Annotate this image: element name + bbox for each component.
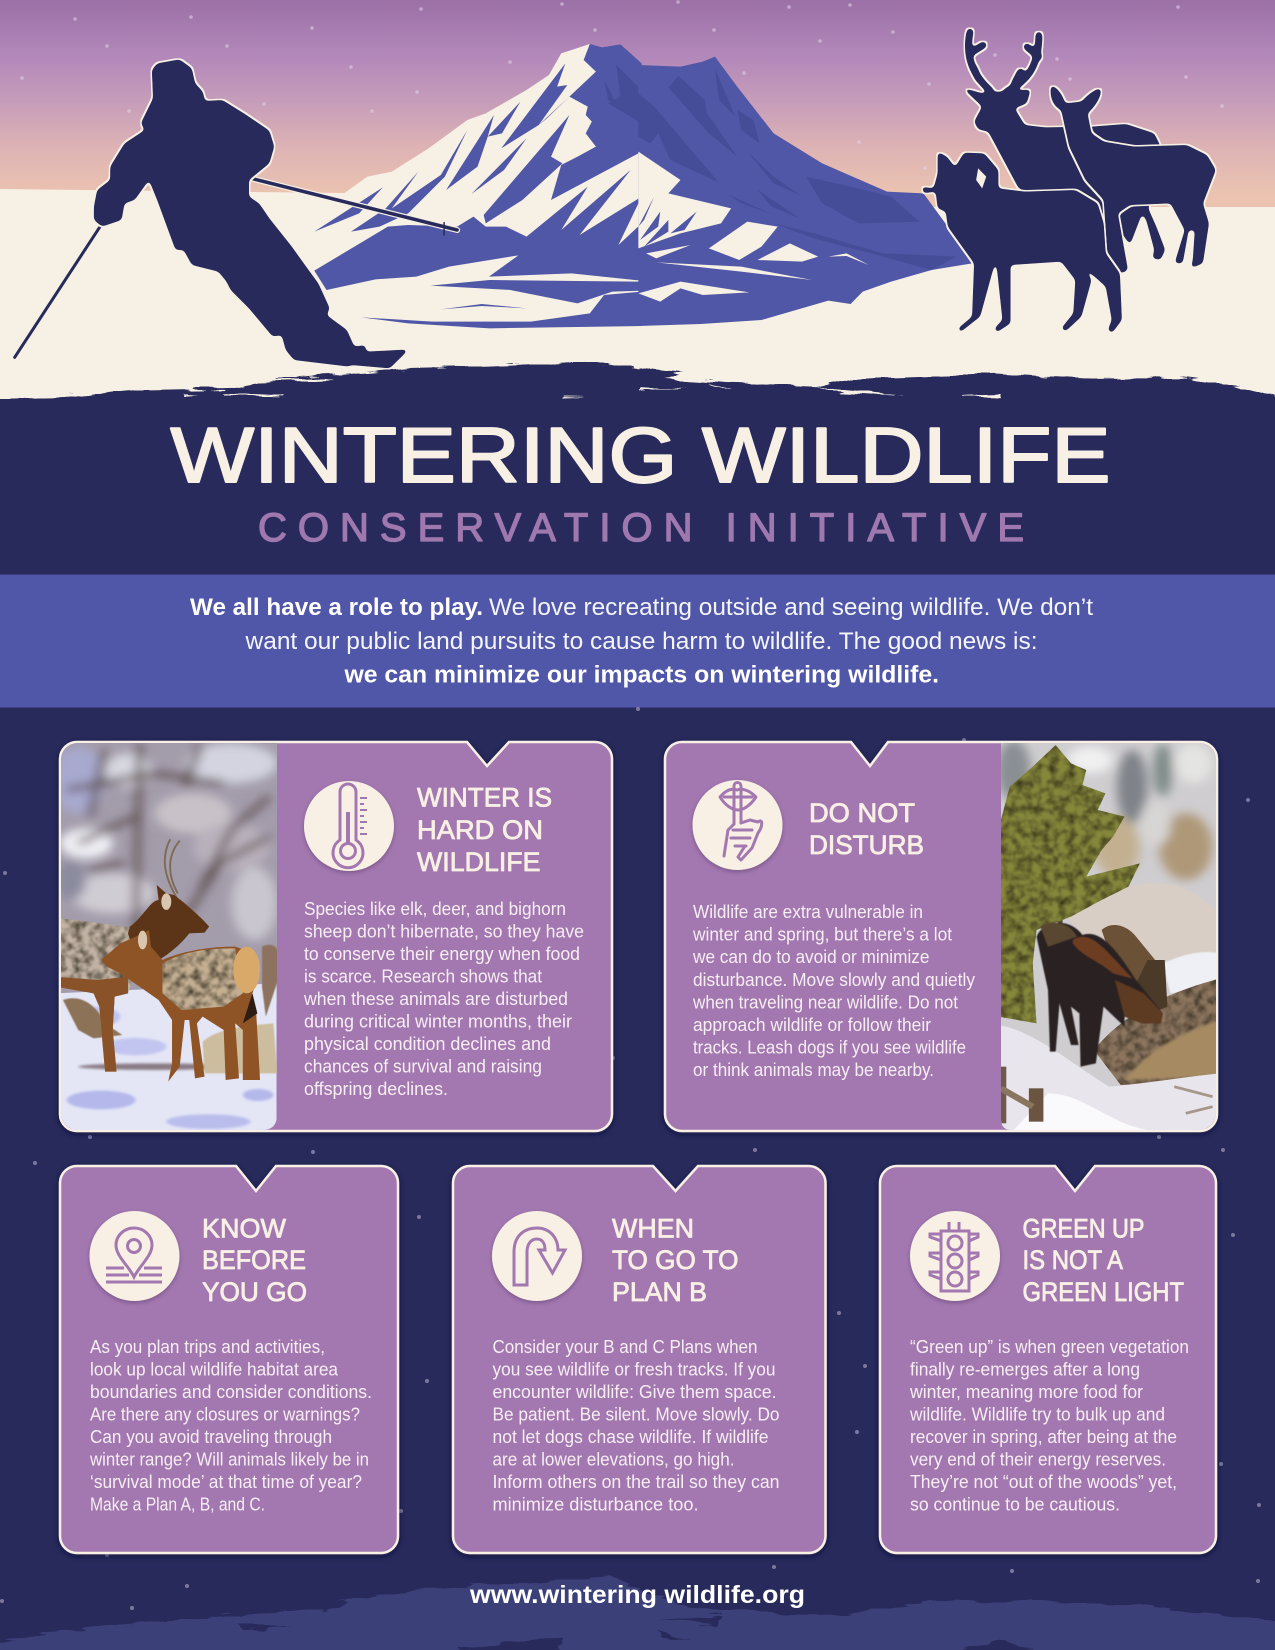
heading bbox=[202, 1214, 307, 1307]
wildlife silhouettes: stag, doe, bighorn ram bbox=[921, 32, 1216, 333]
body text: wildlife. Wildlife try to bulk up and bbox=[909, 1404, 1165, 1424]
panel: green up is not a green light bbox=[880, 1166, 1216, 1553]
doe bbox=[1051, 85, 1216, 273]
body text: physical condition declines and bbox=[304, 1034, 551, 1054]
body text: boundaries and consider conditions. bbox=[90, 1382, 372, 1402]
body text bbox=[909, 1337, 1189, 1514]
footer brush band bbox=[0, 1577, 1275, 1650]
body text: offspring declines. bbox=[304, 1079, 448, 1099]
body text: during critical winter months, their bbox=[304, 1012, 572, 1032]
body text: to conserve their energy when food bbox=[304, 944, 580, 964]
card shape bbox=[665, 742, 1217, 1131]
card shape bbox=[453, 1166, 826, 1553]
body text: finally re-emerges after a long bbox=[910, 1360, 1140, 1380]
body text: approach wildlife or follow their bbox=[693, 1015, 931, 1035]
body text: winter range? Will animals likely be in bbox=[89, 1450, 369, 1470]
right ski pole bbox=[251, 178, 457, 235]
body text: disturbance. Move slowly and quietly bbox=[693, 970, 975, 990]
body text bbox=[692, 902, 975, 1080]
sky stars bbox=[20, 0, 1224, 170]
skier silhouette bbox=[15, 59, 457, 368]
ram horn detail bbox=[976, 168, 986, 188]
panel: know before you go bbox=[60, 1166, 398, 1553]
body text: Inform others on the trail so they can bbox=[492, 1472, 780, 1492]
mountain right half bbox=[638, 57, 972, 326]
stag bbox=[962, 32, 1165, 260]
body text: so continue to be cautious. bbox=[910, 1494, 1120, 1514]
body text: They’re not “out of the woods” yet, bbox=[910, 1472, 1177, 1492]
heading: PLAN B bbox=[612, 1277, 707, 1307]
snow ground bbox=[0, 189, 1275, 420]
body text bbox=[303, 899, 584, 1099]
body text: or think animals may be nearby. bbox=[693, 1060, 934, 1080]
heading: WHEN bbox=[612, 1214, 694, 1244]
body text: you see wildlife or fresh tracks. If you bbox=[492, 1360, 776, 1380]
body text: when traveling near wildlife. Do not bbox=[692, 992, 958, 1012]
heading bbox=[809, 798, 924, 860]
body text: ‘survival mode’ at that time of year? bbox=[90, 1472, 362, 1492]
body text: we can do to avoid or minimize bbox=[692, 947, 930, 967]
body text: Make a Plan A, B, and C. bbox=[90, 1494, 265, 1514]
body text: very end of their energy reserves. bbox=[910, 1450, 1166, 1470]
heading: TO GO TO bbox=[612, 1245, 738, 1275]
body text: when these animals are disturbed bbox=[303, 989, 568, 1009]
body text: Be patient. Be silent. Move slowly. Do bbox=[492, 1404, 780, 1424]
heading: YOU GO bbox=[202, 1277, 307, 1307]
card shape bbox=[60, 742, 612, 1131]
panel: when to go to plan b bbox=[453, 1166, 826, 1553]
heading: WINTER IS bbox=[417, 782, 552, 812]
icon: u-turn arrow bbox=[492, 1211, 582, 1301]
body text: encounter wildlife: Give them space. bbox=[492, 1382, 776, 1402]
intro band bbox=[0, 574, 1275, 708]
navy stars bbox=[0, 707, 1261, 1610]
card shape bbox=[880, 1166, 1216, 1553]
card shape bbox=[60, 1166, 398, 1553]
icon: thermometer bbox=[304, 781, 394, 871]
body text: winter and spring, but there’s a lot bbox=[692, 924, 952, 944]
body text bbox=[89, 1337, 372, 1514]
body text: Can you avoid traveling through bbox=[90, 1427, 332, 1447]
heading bbox=[417, 782, 552, 877]
intro text bbox=[190, 594, 1093, 688]
intro text: we can minimize our impacts on wintering wildlife. bbox=[343, 662, 939, 688]
heading: WILDLIFE bbox=[417, 847, 540, 877]
heading: BEFORE bbox=[202, 1245, 306, 1275]
body text: are at lower elevations, go high. bbox=[492, 1450, 734, 1470]
photo: moose in snow bbox=[996, 740, 1220, 1137]
body text: look up local wildlife habitat area bbox=[90, 1360, 339, 1380]
intro text: We love recreating outside and seeing wildlife. We don’t bbox=[489, 594, 1093, 621]
icon: finger over lips bbox=[692, 780, 782, 870]
brush edge of navy band bbox=[0, 362, 1275, 430]
heading: DO NOT bbox=[809, 798, 915, 828]
body text: Consider your B and C Plans when bbox=[492, 1337, 758, 1357]
title: WINTERING WILDLIFE bbox=[170, 411, 1110, 499]
body text: “Green up” is when green vegetation bbox=[910, 1337, 1189, 1357]
body text: is scarce. Research shows that bbox=[304, 966, 542, 986]
heading bbox=[612, 1214, 738, 1307]
sky bbox=[0, 0, 1275, 212]
photo: elk in snow bbox=[51, 740, 285, 1137]
body text: tracks. Leash dogs if you see wildlife bbox=[693, 1038, 966, 1058]
heading: GREEN LIGHT bbox=[1022, 1277, 1184, 1307]
mountain left half bbox=[310, 44, 642, 333]
icon: map pin bbox=[90, 1211, 180, 1301]
heading: HARD ON bbox=[417, 815, 543, 845]
body text: Are there any closures or warnings? bbox=[90, 1404, 360, 1424]
body text: winter, meaning more food for bbox=[909, 1382, 1143, 1402]
body text: recover in spring, after being at the bbox=[910, 1427, 1177, 1447]
heading bbox=[1022, 1214, 1184, 1307]
intro text: want our public land pursuits to cause harm to wildlife. The good news is: bbox=[244, 628, 1037, 655]
body text: chances of survival and raising bbox=[304, 1056, 542, 1076]
heading: KNOW bbox=[202, 1214, 287, 1244]
left ski pole bbox=[15, 227, 100, 357]
panel: do not disturb bbox=[665, 740, 1220, 1137]
body text: sheep don’t hibernate, so they have bbox=[304, 922, 584, 942]
body text: Wildlife are extra vulnerable in bbox=[693, 902, 923, 922]
ram bbox=[921, 152, 1122, 333]
subtitle: CONSERVATION INITIATIVE bbox=[258, 506, 1024, 550]
icon: traffic light bbox=[910, 1211, 1000, 1301]
skier body bbox=[94, 59, 409, 368]
heading: IS NOT A bbox=[1022, 1245, 1123, 1275]
heading: DISTURB bbox=[809, 830, 924, 860]
body text: Species like elk, deer, and bighorn bbox=[304, 899, 566, 919]
header illustration: winter scene bbox=[0, 0, 1275, 430]
heading: GREEN UP bbox=[1022, 1214, 1144, 1244]
intro text: We all have a role to play. bbox=[190, 594, 483, 621]
body text: As you plan trips and activities, bbox=[90, 1337, 325, 1357]
body text: minimize disturbance too. bbox=[492, 1494, 698, 1514]
footer url: www.wintering wildlife.org bbox=[469, 1581, 805, 1609]
panel: winter is hard on wildlife bbox=[51, 740, 612, 1137]
body text bbox=[492, 1337, 780, 1514]
body text: not let dogs chase wildlife. If wildlife bbox=[492, 1427, 768, 1447]
